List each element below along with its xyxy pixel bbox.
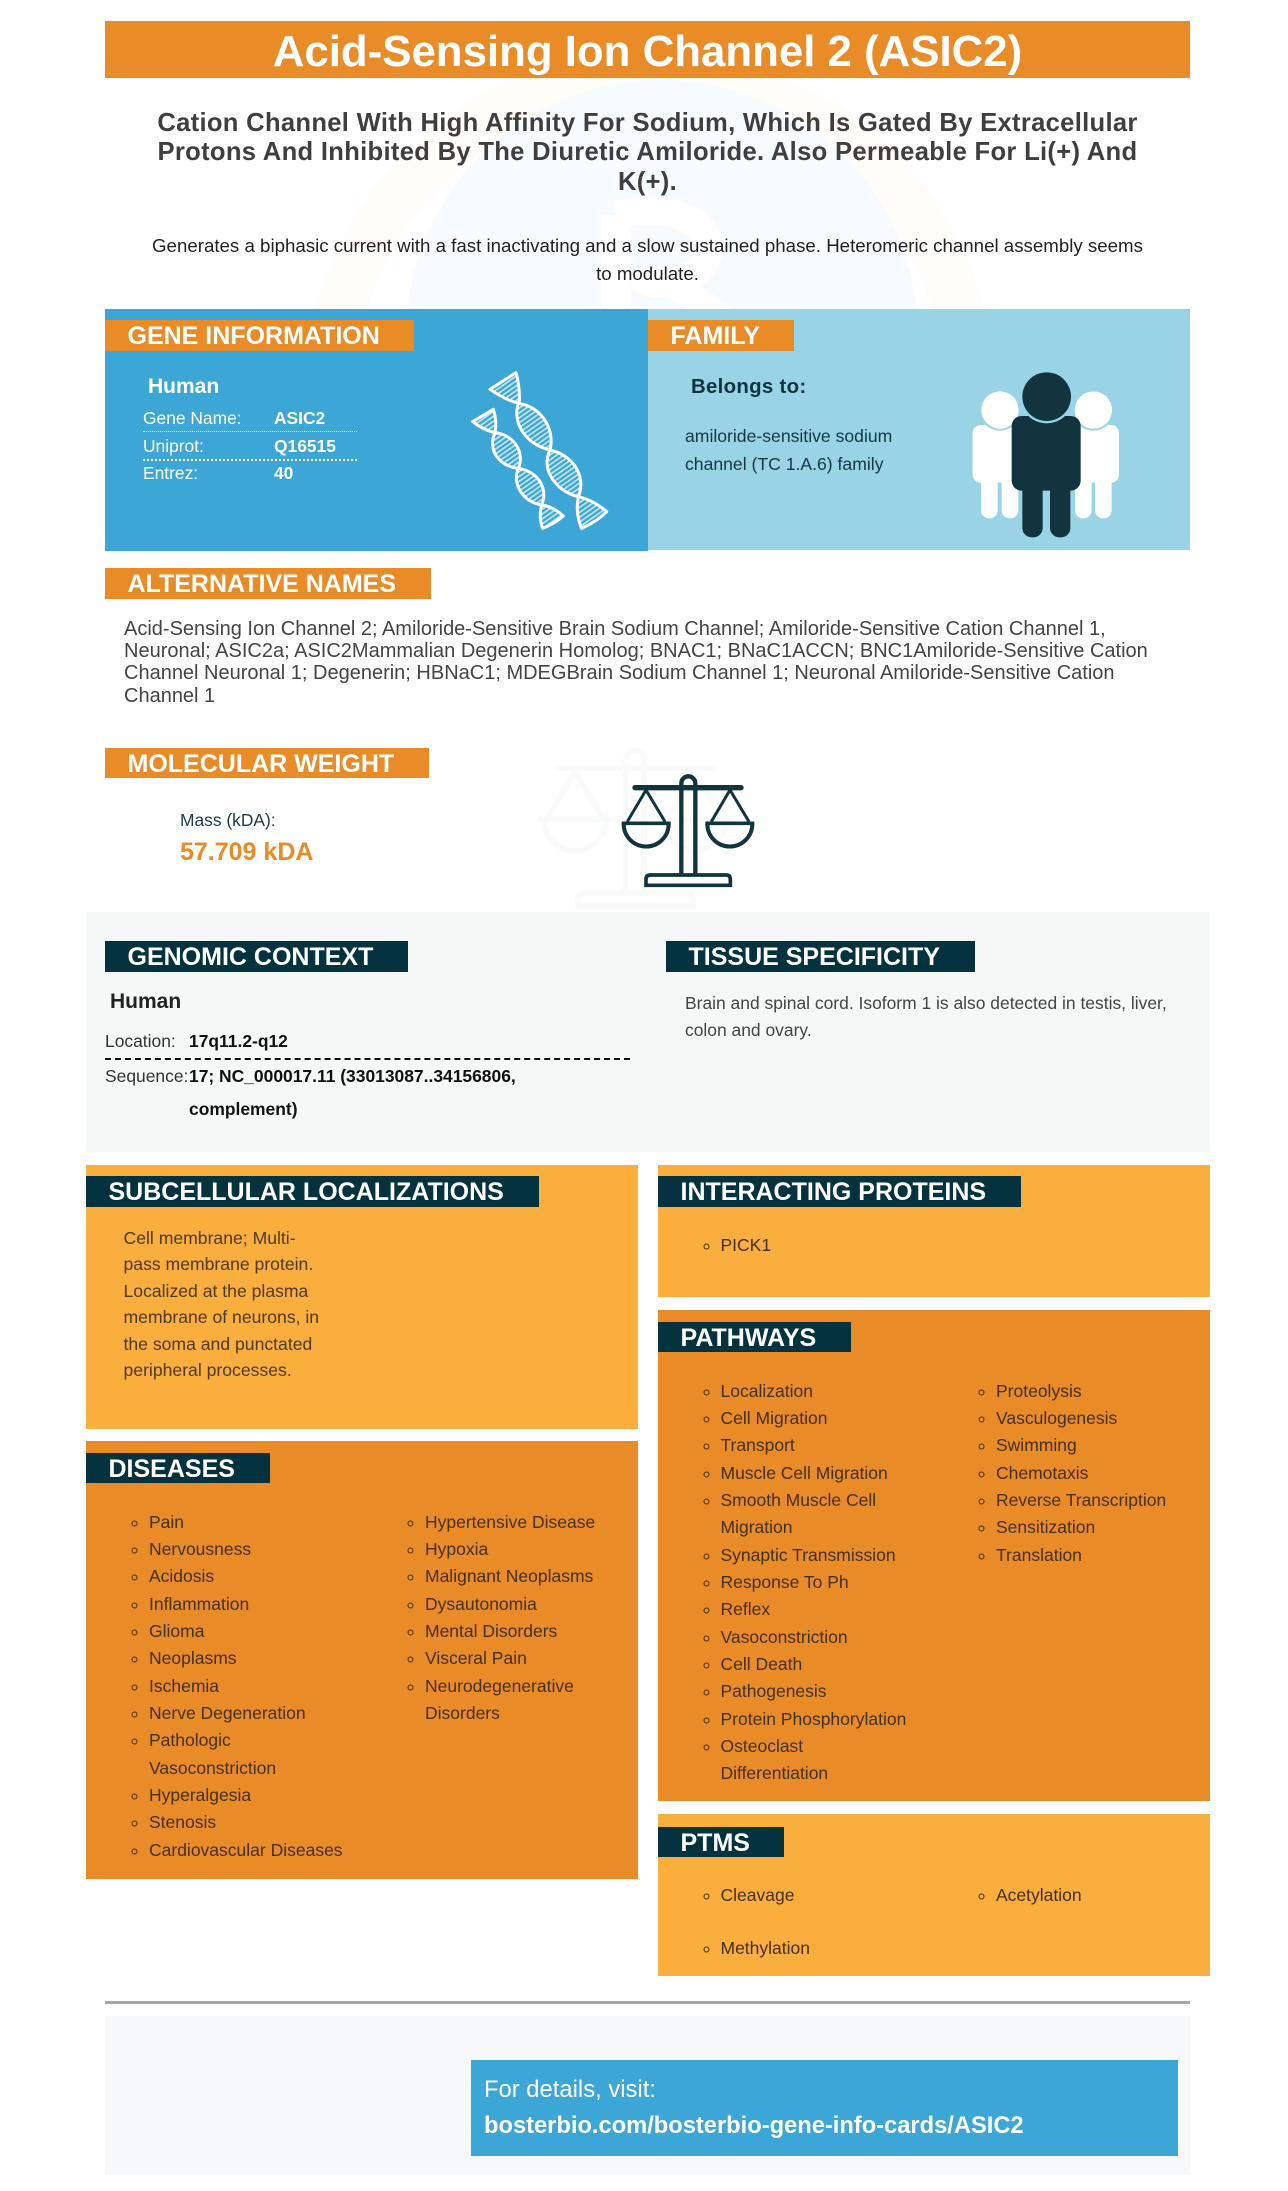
description (152, 235, 1143, 284)
list: pathways column 2: Swimming (996, 1435, 1077, 1455)
list: pathways column 1: Synaptic Transmission (720, 1545, 896, 1565)
family description: amiloride-sensitive sodium (685, 426, 892, 446)
icon: dna (471, 371, 608, 530)
gene info table: ASIC2 (274, 408, 325, 428)
panel: subcellular localizations (86, 1165, 638, 1429)
title banner: Acid-Sensing Ion Channel 2 (ASIC2) (273, 27, 1022, 76)
list: diseases column 1: Inflammation (149, 1594, 249, 1614)
list: diseases column 1: Vasoconstriction (149, 1758, 276, 1778)
genomic location and sequence: 17; NC_000017.11 (33013087..34156806, (189, 1066, 516, 1086)
heading: ptms (658, 1827, 784, 1857)
heading: family: FAMILY (670, 322, 760, 350)
subtitle: Protons And Inhibited By The Diuretic Amiloride. Also Permeable For Li(+) And (158, 138, 1137, 166)
alternative names text (124, 618, 1148, 707)
list: pathways column 1: Localization (720, 1380, 813, 1400)
heading: subcellular localizations: SUBCELLULAR LOCALIZATIONS (108, 1178, 504, 1206)
list: pathways column 1: Protein Phosphorylation (720, 1709, 906, 1729)
list: pathways column 2: Sensitization (996, 1517, 1095, 1537)
list: diseases column 2: Mental Disorders (425, 1621, 557, 1641)
list: diseases column 1 (132, 1512, 343, 1860)
list: diseases column 1: Hyperalgesia (149, 1785, 251, 1805)
heading: molecular weight: MOLECULAR WEIGHT (128, 750, 394, 778)
alternative names text: Acid-Sensing Ion Channel 2; Amiloride-Sensitive Brain Sodium Channel; Amiloride-Sensitive Cation Channel 1, (124, 618, 1106, 640)
list: pathways column 1: Osteoclast (720, 1736, 803, 1756)
panel: genomic context and tissue specificity (86, 912, 1210, 1152)
heading: interacting proteins: INTERACTING PROTEINS (680, 1178, 986, 1206)
gene info table: 40 (274, 463, 293, 483)
list: pathways column 1: Pathogenesis (720, 1681, 827, 1701)
heading: gene information: GENE INFORMATION (128, 322, 380, 350)
subcellular text: peripheral processes. (124, 1360, 292, 1380)
icon: balance scale (622, 774, 754, 888)
list: pathways column 1: Muscle Cell Migration (720, 1463, 888, 1483)
list: diseases column 2: Dysautonomia (425, 1594, 537, 1614)
panel: pathways (658, 1310, 1210, 1801)
list: diseases column 1: Neoplasms (149, 1648, 237, 1668)
gene info table: Uniprot: (143, 436, 204, 456)
callout: details link: bosterbio.com/bosterbio-gene-info-cards/ASIC2 (484, 2113, 1024, 2139)
list: ptms left (704, 1885, 810, 1958)
list: pathways column 1: Reflex (720, 1599, 770, 1619)
genomic species label: Human (110, 990, 181, 1013)
list: ptms right: Acetylation (996, 1885, 1082, 1905)
list: pathways column 1: Cell Death (720, 1654, 802, 1674)
panel: diseases (86, 1441, 638, 1879)
list: pathways column 1: Response To Ph (720, 1572, 849, 1592)
family label: Belongs to: (691, 376, 806, 398)
heading: diseases (86, 1453, 270, 1483)
list: ptms left: Methylation (720, 1938, 810, 1958)
description: Generates a biphasic current with a fast inactivating and a slow sustained phase. Heteromeric channel assembly seems (152, 235, 1143, 256)
subcellular text: pass membrane protein. (124, 1254, 313, 1274)
alternative names text: Neuronal; ASIC2a; ASIC2Mammalian Degenerin Homolog; BNAC1; BNaC1ACCN; BNC1Amiloride-Sensitive Cation (124, 640, 1148, 662)
list: diseases column 1: Nerve Degeneration (149, 1703, 306, 1723)
list: diseases column 1: Pathologic (149, 1730, 231, 1750)
tissue specificity text: colon and ovary. (685, 1020, 812, 1040)
list: diseases column 2 (408, 1512, 595, 1723)
list: pathways column 1: Migration (720, 1517, 792, 1537)
family description (685, 426, 892, 474)
subcellular text: membrane of neurons, in (124, 1307, 319, 1327)
list: pathways column 2 (978, 1380, 1166, 1565)
list: ptms left: Cleavage (720, 1885, 794, 1905)
gene info table: Entrez: (143, 463, 198, 483)
subcellular text (124, 1228, 319, 1380)
footer rule (105, 2001, 1190, 2004)
subtitle (157, 109, 1138, 196)
icon: people (972, 372, 1119, 538)
list: diseases column 1: Glioma (149, 1621, 204, 1641)
panel: interacting proteins (658, 1165, 1210, 1297)
description: to modulate. (596, 263, 699, 284)
list: diseases column 1: Nervousness (149, 1539, 251, 1559)
heading: diseases: DISEASES (108, 1455, 235, 1483)
list: pathways column 1: Differentiation (720, 1763, 828, 1783)
title banner (105, 21, 1190, 78)
genomic location and sequence: complement) (189, 1099, 298, 1119)
heading: ptms: PTMS (680, 1829, 750, 1857)
heading: pathways (658, 1322, 851, 1352)
heading: tissue specificity: TISSUE SPECIFICITY (688, 943, 940, 971)
list: diseases column 2: Neurodegenerative (425, 1676, 574, 1696)
tissue specificity text (685, 993, 1167, 1040)
subcellular text: Localized at the plasma (124, 1281, 308, 1301)
panel: footer (105, 2016, 1190, 2175)
list: pathways column 1: Cell Migration (720, 1408, 827, 1428)
mass value: 57.709 kDA (180, 838, 313, 866)
list: diseases column 2: Malignant Neoplasms (425, 1566, 593, 1586)
list: pathways column 2: Vasculogenesis (996, 1408, 1117, 1428)
list: diseases column 1: Ischemia (149, 1676, 219, 1696)
subcellular text: Cell membrane; Multi- (124, 1228, 296, 1248)
list: pathways column 1: Transport (720, 1435, 795, 1455)
heading: genomic context: GENOMIC CONTEXT (128, 943, 373, 971)
list: diseases column 2: Hypoxia (425, 1539, 488, 1559)
subcellular text: the soma and punctated (124, 1334, 312, 1354)
gene info table (143, 408, 357, 483)
subtitle: K(+). (618, 168, 677, 196)
panel: family (648, 309, 1190, 550)
list: interacting proteins: PICK1 (720, 1235, 771, 1255)
tissue specificity text: Brain and spinal cord. Isoform 1 is also detected in testis, liver, (685, 993, 1167, 1013)
genomic location and sequence (105, 1031, 630, 1119)
list: diseases column 2: Hypertensive Disease (425, 1512, 595, 1532)
heading: alternative names: ALTERNATIVE NAMES (128, 570, 396, 598)
alternative names text: Channel Neuronal 1; Degenerin; HBNaC1; MDEGBrain Sodium Channel 1; Neuronal Amiloride-Sensitive Cation (124, 662, 1115, 684)
callout: details link (471, 2060, 1178, 2156)
list: diseases column 2: Visceral Pain (425, 1648, 527, 1668)
heading: family (648, 320, 794, 351)
list: diseases column 1: Stenosis (149, 1812, 216, 1832)
list: diseases column 1: Cardiovascular Diseases (149, 1840, 343, 1860)
list: pathways column 2: Translation (996, 1545, 1082, 1565)
list: diseases column 1: Acidosis (149, 1566, 214, 1586)
list: pathways column 1: Vasoconstriction (720, 1627, 848, 1647)
gene info table: Gene Name: (143, 408, 242, 428)
panel: gene information (105, 309, 648, 551)
genomic location and sequence: Location: (105, 1031, 176, 1051)
list: diseases column 1: Pain (149, 1512, 184, 1532)
panel: ptms (658, 1814, 1210, 1976)
genomic location and sequence: Sequence: (105, 1066, 188, 1086)
gene info table: Q16515 (274, 436, 336, 456)
background watermark logo (408, 80, 916, 309)
mass label: Mass (kDA): (180, 810, 276, 830)
subtitle: Cation Channel With High Affinity For Sodium, Which Is Gated By Extracellular (157, 109, 1138, 137)
list: pathways column 1 (704, 1380, 906, 1783)
alternative names text: Channel 1 (124, 685, 215, 707)
gene species label: Human (148, 375, 219, 398)
genomic location and sequence: 17q11.2-q12 (189, 1031, 288, 1051)
family description: channel (TC 1.A.6) family (685, 454, 884, 474)
list: pathways column 2: Proteolysis (996, 1380, 1082, 1400)
callout: details link: For details, visit: (484, 2076, 656, 2103)
list: diseases column 2: Disorders (425, 1703, 500, 1723)
heading: pathways: PATHWAYS (680, 1324, 816, 1352)
list: pathways column 2: Chemotaxis (996, 1463, 1088, 1483)
list: pathways column 1: Smooth Muscle Cell (720, 1490, 876, 1510)
list: pathways column 2: Reverse Transcription (996, 1490, 1166, 1510)
